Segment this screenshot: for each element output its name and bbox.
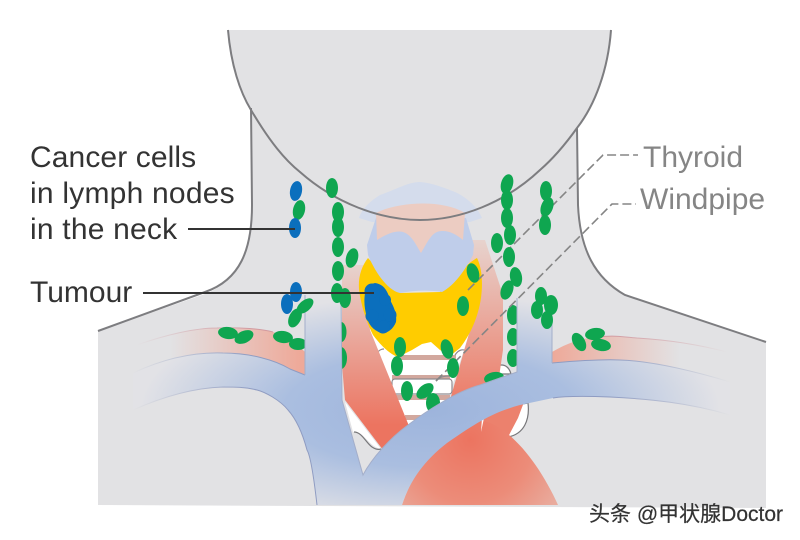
larynx bbox=[367, 218, 474, 293]
text label: thyroid: Thyroid bbox=[643, 141, 743, 174]
text label: cancer cells in lymph nodes: in lymph nodes bbox=[30, 177, 235, 210]
left carotid artery bbox=[342, 265, 409, 450]
white slit bbox=[481, 418, 484, 432]
windpipe bbox=[366, 325, 472, 428]
right subclavian artery bbox=[552, 336, 727, 381]
right carotid artery bbox=[450, 240, 503, 400]
upper right lung tip bbox=[490, 365, 511, 374]
vessel edge lines bbox=[133, 295, 730, 505]
lymph nodes behind veins bbox=[289, 305, 519, 413]
body outline bbox=[98, 30, 766, 342]
left subclavian artery bbox=[137, 328, 305, 376]
thyroid gland bbox=[359, 258, 482, 357]
larynx pale top bbox=[359, 182, 482, 222]
watermark: 头条 @甲状腺Doctor bbox=[589, 503, 783, 526]
aortic arch bbox=[402, 420, 558, 505]
pink cartilage bbox=[376, 204, 465, 253]
text label: tumour: Tumour bbox=[30, 276, 132, 309]
right lung tip bbox=[500, 403, 528, 437]
text label: cancer cells in lymph nodes: in the neck bbox=[30, 213, 178, 246]
veins bbox=[133, 290, 730, 505]
text label: windpipe: Windpipe bbox=[640, 183, 765, 216]
left lung tip bbox=[345, 402, 381, 449]
cancer cells in neck nodes bbox=[281, 180, 304, 314]
body silhouette bbox=[98, 30, 766, 508]
lower artery branch bbox=[470, 402, 524, 450]
pointer line to neck nodes bbox=[188, 228, 295, 230]
dashed leader lines bbox=[436, 155, 638, 381]
head and jaw outline bbox=[228, 30, 611, 220]
text label: cancer cells in lymph nodes: Cancer cells bbox=[30, 141, 196, 174]
tumour bbox=[364, 283, 396, 334]
lymph nodes bbox=[217, 173, 612, 402]
pointer line to tumour bbox=[143, 292, 374, 294]
